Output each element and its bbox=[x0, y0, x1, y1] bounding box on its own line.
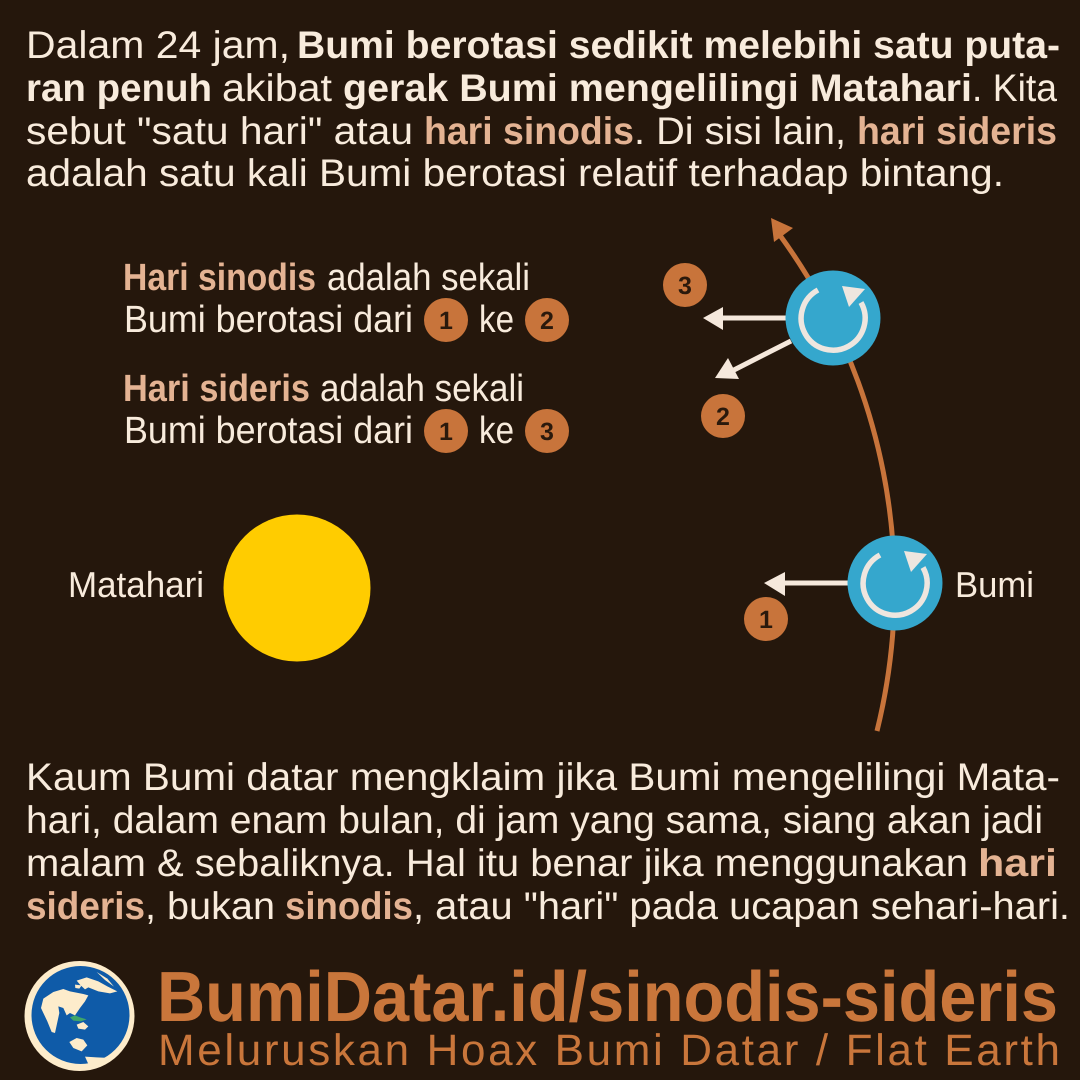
definition: hari sideris: Hari sideris bbox=[123, 368, 310, 410]
label: Matahari: Matahari bbox=[68, 564, 204, 605]
badge: 2 bbox=[701, 394, 745, 438]
intro paragraph: Bumi berotasi sedikit melebihi satu puta- bbox=[297, 24, 1060, 67]
definition: hari sinodis: Bumi berotasi dari bbox=[124, 299, 413, 341]
orbit arrow bbox=[771, 218, 895, 731]
icon: globe logo bbox=[24, 961, 134, 1071]
earth: first position bbox=[848, 536, 942, 630]
definition: hari sinodis bbox=[123, 257, 569, 342]
intro paragraph: adalah satu kali Bumi berotasi relatif terhadap bintang. bbox=[26, 152, 1004, 195]
intro paragraph: . Kita bbox=[972, 67, 1058, 110]
badge: 3: 3 bbox=[678, 272, 692, 300]
closing paragraph: sinodis bbox=[285, 885, 413, 928]
intro paragraph: sebut "satu hari" atau bbox=[26, 110, 413, 153]
icon: sun bbox=[224, 514, 370, 662]
definition: hari sinodis: adalah sekali bbox=[327, 257, 530, 299]
definition: hari sideris: 3 bbox=[540, 418, 554, 446]
intro paragraph: gerak Bumi mengelilingi Matahari bbox=[343, 67, 972, 110]
closing paragraph: hari bbox=[978, 842, 1057, 885]
arrow: towards 1 bbox=[764, 572, 850, 596]
intro paragraph: hari sinodis bbox=[424, 110, 634, 153]
closing paragraph: sideris bbox=[26, 885, 145, 928]
intro paragraph bbox=[26, 24, 1060, 195]
intro paragraph: Dalam 24 jam, bbox=[26, 24, 290, 67]
earth: second position bbox=[786, 270, 880, 366]
definitions legend bbox=[123, 257, 569, 453]
definition: hari sinodis: 1 bbox=[439, 307, 453, 335]
badge: 3 bbox=[663, 263, 707, 307]
footer tagline: Meluruskan Hoax Bumi Datar / Flat Earth bbox=[158, 1026, 1060, 1075]
label: Bumi: Bumi bbox=[955, 564, 1034, 605]
definition: hari sideris: adalah sekali bbox=[320, 368, 524, 410]
definition: hari sideris: 1 bbox=[439, 418, 453, 446]
closing paragraph: , bukan bbox=[145, 885, 275, 928]
arrow: towards 2 bbox=[715, 341, 791, 379]
closing paragraph: malam & sebaliknya. Hal itu benar jika menggunakan bbox=[26, 842, 968, 885]
intro paragraph: ran penuh bbox=[26, 67, 212, 110]
intro paragraph: hari sideris bbox=[857, 110, 1057, 153]
closing paragraph: , atau "hari" pada ucapan sehari-hari. bbox=[413, 885, 1070, 928]
closing paragraph: Kaum Bumi datar mengklaim jika Bumi mengelilingi Mata- bbox=[26, 756, 1060, 799]
definition: hari sinodis: 2 bbox=[540, 307, 554, 335]
intro paragraph: . Di sisi lain, bbox=[634, 110, 846, 153]
intro paragraph: akibat bbox=[222, 67, 332, 110]
definition: hari sideris: Bumi berotasi dari bbox=[124, 410, 413, 452]
arrow: towards 3 bbox=[703, 307, 790, 330]
badge: 2: 2 bbox=[716, 403, 730, 431]
definition: hari sideris bbox=[123, 368, 569, 453]
definition: hari sinodis: ke bbox=[479, 299, 514, 341]
closing paragraph bbox=[26, 756, 1070, 928]
badge: 1 bbox=[744, 597, 788, 641]
definition: hari sideris: ke bbox=[479, 410, 514, 452]
closing paragraph: hari, dalam enam bulan, di jam yang sama, siang akan jadi bbox=[26, 799, 1043, 842]
definition: hari sinodis: Hari sinodis bbox=[123, 257, 316, 299]
badge: 1: 1 bbox=[759, 606, 773, 634]
